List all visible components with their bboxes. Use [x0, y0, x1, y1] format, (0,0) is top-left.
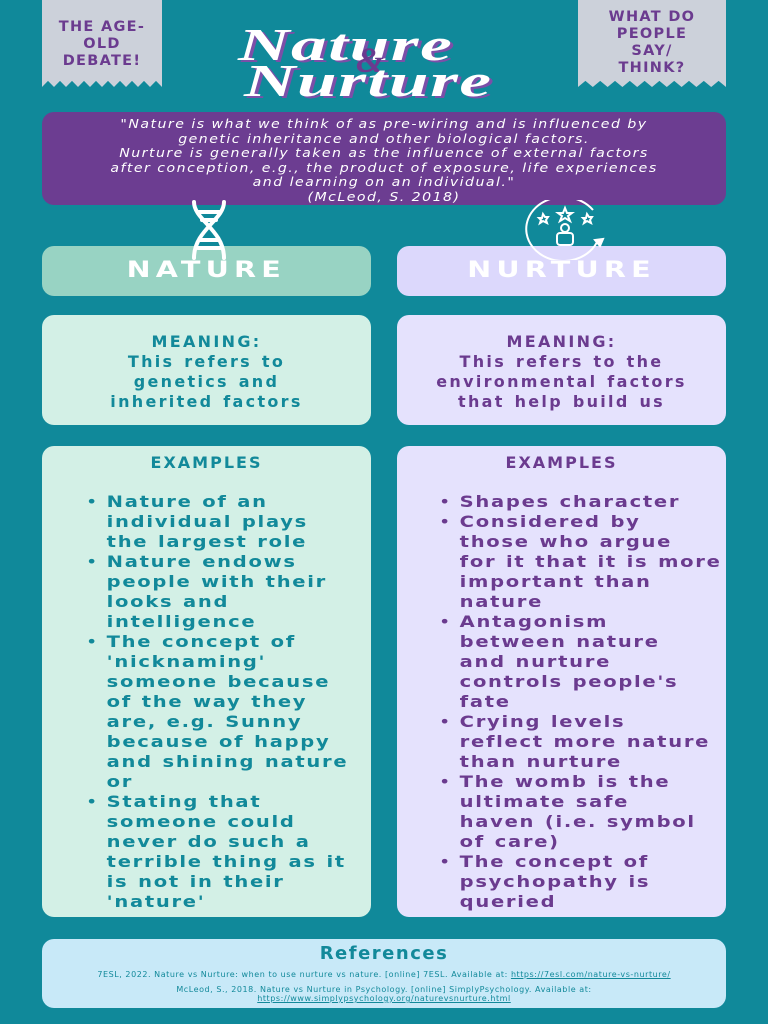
panel: nurture meaning: MEANING:	[507, 332, 616, 351]
panel: nature examples	[42, 446, 371, 917]
quote box: "Nature is what we think of as pre-wiring and is influenced by	[120, 116, 648, 131]
nurture header: NURTURE	[467, 258, 656, 283]
panel: nature examples: never do such a	[107, 832, 311, 851]
panel: nature examples: EXAMPLES	[151, 453, 262, 472]
panel: nature examples: 'nicknaming'	[107, 652, 266, 671]
banner: age-old debate: OLD	[83, 36, 121, 52]
panel: nurture examples: queried	[460, 892, 556, 911]
banner: what do people say	[578, 0, 726, 87]
nature header: NATURE	[127, 258, 286, 283]
panel: nature examples: The concept of	[107, 632, 296, 651]
panel: nurture examples: Crying levels	[460, 712, 625, 731]
banner: age-old debate: THE AGE-	[59, 19, 145, 35]
panel: nature examples: people with their	[107, 572, 327, 591]
panel: nurture examples: than nurture	[460, 752, 622, 771]
panel: references: References	[320, 943, 448, 964]
nurture header	[397, 246, 726, 296]
banner: what do people say: THINK?	[618, 60, 686, 76]
panel: nurture meaning: environmental factors	[436, 372, 687, 391]
banner: what do people say: WHAT DO	[609, 9, 695, 25]
panel: nature examples: is not in their	[107, 872, 285, 891]
panel: references: McLeod, S., 2018. Nature vs Nurture in Psychology. [online] SimplyPsychology. Available at:	[176, 985, 592, 994]
panel: nurture examples: of care)	[460, 832, 560, 851]
panel: nurture examples: for it that it is more	[460, 552, 722, 571]
panel: nurture examples: between nature	[460, 632, 660, 651]
panel: nurture examples: The concept of	[460, 852, 649, 871]
panel: nurture examples	[397, 446, 726, 917]
panel: nurture examples: controls people's	[460, 672, 678, 691]
quote box: after conception, e.g., the product of exposure, life experiences	[110, 160, 658, 174]
quote box: genetic inheritance and other biological factors.	[178, 130, 590, 146]
panel: nurture examples: reflect more nature	[460, 732, 710, 751]
panel: nature examples: Stating that	[107, 792, 261, 811]
panel: nurture examples: important than	[460, 572, 652, 591]
panel: nature examples: and shining nature	[107, 752, 348, 771]
panel: nature meaning: genetics and	[134, 372, 279, 391]
panel: nurture examples: EXAMPLES	[506, 453, 617, 472]
panel: nurture examples: fate	[460, 692, 511, 711]
panel: nurture examples: Shapes character	[460, 492, 680, 511]
panel: nature examples: Nature endows	[107, 552, 297, 571]
quote box	[42, 112, 726, 205]
panel: nature examples: the largest role	[107, 532, 307, 551]
panel: nature examples: someone because	[107, 672, 330, 691]
title	[237, 19, 493, 106]
quote box: and learning on an individual."	[253, 174, 515, 189]
panel: nurture examples: Considered by	[460, 512, 641, 531]
banner: age-old debate: DEBATE!	[63, 53, 141, 69]
quote box: (McLeod, S. 2018)	[307, 188, 460, 204]
panel: nurture examples: ultimate safe	[460, 792, 629, 811]
title: Nature	[238, 19, 453, 70]
panel: nurture examples: The womb is the	[460, 772, 670, 791]
banner: what do people say: SAY/	[631, 43, 673, 59]
panel: nurture examples: nature	[460, 592, 543, 611]
icon: dna	[192, 200, 226, 260]
panel: nature examples: someone could	[107, 812, 296, 831]
panel: nature examples: 'nature'	[107, 892, 205, 911]
banner: what do people say: PEOPLE	[617, 26, 687, 42]
panel: nature examples: looks and	[107, 592, 229, 611]
panel: nature examples: Nature of an	[107, 492, 268, 511]
panel: references	[42, 939, 726, 1008]
panel: nature examples: individual plays	[107, 512, 308, 531]
panel: nurture examples: and nurture	[460, 652, 611, 671]
quote box: Nurture is generally taken as the influence of external factors	[119, 145, 649, 160]
panel: nature examples: or	[107, 772, 133, 791]
panel: references: https://www.simplypsychology.org/naturevsnurture.html	[257, 994, 511, 1003]
panel: nature meaning	[42, 315, 371, 425]
panel: nature examples: because of happy	[107, 732, 330, 751]
panel: nurture meaning: that help build us	[458, 392, 665, 411]
panel: nurture meaning: This refers to the	[460, 352, 663, 371]
panel: references: 7ESL, 2022. Nature vs Nurture: when to use nurture vs nature. [online] 7ESL. Available at: https://7esl.com/nature-vs-nurture/	[97, 970, 671, 979]
title: Nurture	[244, 55, 493, 106]
title: &	[356, 40, 384, 80]
banner: age-old debate	[42, 0, 162, 87]
panel: nature examples: are, e.g. Sunny	[107, 712, 302, 731]
panel: nature examples: of the way they	[107, 692, 307, 711]
panel: nurture meaning	[397, 315, 726, 425]
panel: nature examples: intelligence	[107, 612, 256, 631]
panel: nature examples: terrible thing as it	[107, 852, 346, 871]
panel: nurture examples: those who argue	[460, 532, 672, 551]
panel: nature meaning: MEANING:	[152, 332, 261, 351]
nature header	[42, 246, 371, 296]
panel: nature meaning: This refers to	[128, 352, 285, 371]
panel: nurture examples: haven (i.e. symbol	[460, 812, 696, 831]
panel: nurture examples: psychopathy is	[460, 872, 650, 891]
panel: nurture examples: Antagonism	[460, 612, 608, 631]
icon: person with stars	[525, 200, 605, 260]
panel: nature meaning: inherited factors	[110, 392, 303, 411]
